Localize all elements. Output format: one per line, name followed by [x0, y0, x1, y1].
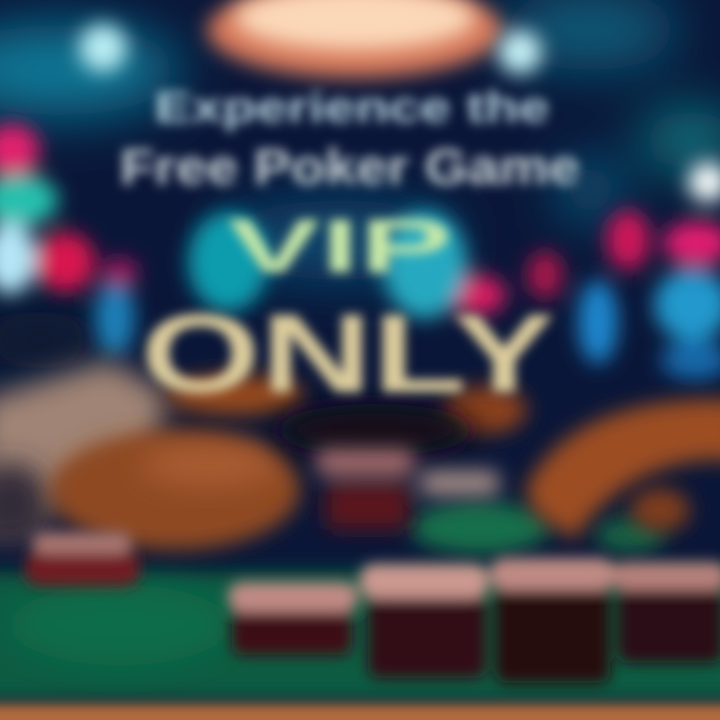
heading line 2: Free Poker Game	[120, 139, 580, 195]
left hand	[0, 360, 305, 550]
bokeh lights	[0, 24, 720, 380]
centre chip stack	[315, 450, 500, 530]
heading line 4: ONLY	[140, 291, 556, 416]
poker table	[0, 502, 720, 702]
centre shadow	[275, 404, 475, 456]
front chip stacks	[228, 558, 720, 683]
small left chip stack	[25, 532, 140, 586]
chip stack 1	[228, 582, 358, 655]
chip stack 2	[360, 564, 488, 678]
ceiling lamp	[207, 0, 503, 78]
chip stack 3	[490, 558, 615, 683]
heading line 3: VIP	[228, 204, 452, 289]
background glow: teal haze	[0, 0, 720, 370]
chip stack 4	[612, 562, 720, 663]
heading line 1: Experience the	[154, 83, 550, 132]
table edge	[0, 704, 720, 720]
right hand	[443, 386, 720, 540]
